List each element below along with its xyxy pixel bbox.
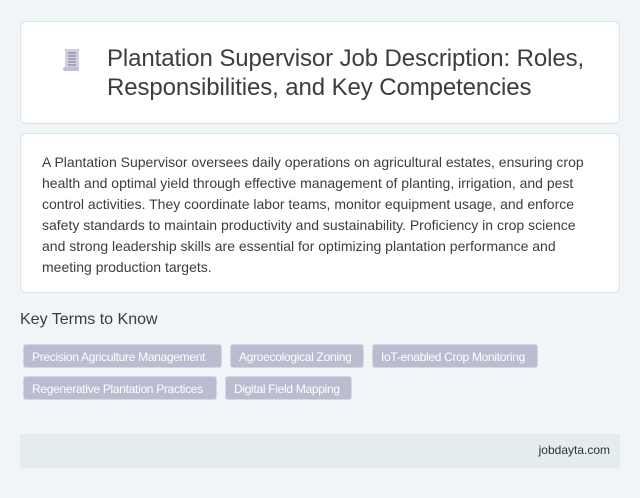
- heading: key terms: Key Terms to Know: [20, 311, 158, 328]
- tag: Regenerative Plantation Practices: [32, 382, 203, 396]
- icon: document: [63, 49, 79, 71]
- tags: [23, 344, 538, 400]
- title: Plantation Supervisor Job Description: Roles, Responsibilities, and Key Competencies: [107, 45, 584, 101]
- tag: Precision Agriculture Management: [32, 350, 205, 364]
- tag: [372, 344, 538, 368]
- description text: A Plantation Supervisor oversees daily operations on agricultural estates, ensuring crop health and optimal yield through effective management of planting, irrigation, and pest control activities. They coordinate labor teams, monitor equipment usage, and enforce safety standards to maintain productivity and sustainability. Proficiency in crop science and strong leadership skills are essential for optimizing plantation performance and meeting production targets.: [42, 154, 584, 275]
- tag: Agroecological Zoning: [239, 350, 351, 364]
- header card: [20, 21, 620, 124]
- footer: [20, 434, 620, 468]
- tag: [23, 376, 217, 400]
- tag: [230, 344, 364, 368]
- footer text: jobdayta.com: [539, 443, 610, 457]
- tag: Digital Field Mapping: [234, 382, 340, 396]
- tag: [225, 376, 352, 400]
- description card: [20, 133, 620, 293]
- tag: [23, 344, 222, 368]
- tag: IoT-enabled Crop Monitoring: [381, 350, 525, 364]
